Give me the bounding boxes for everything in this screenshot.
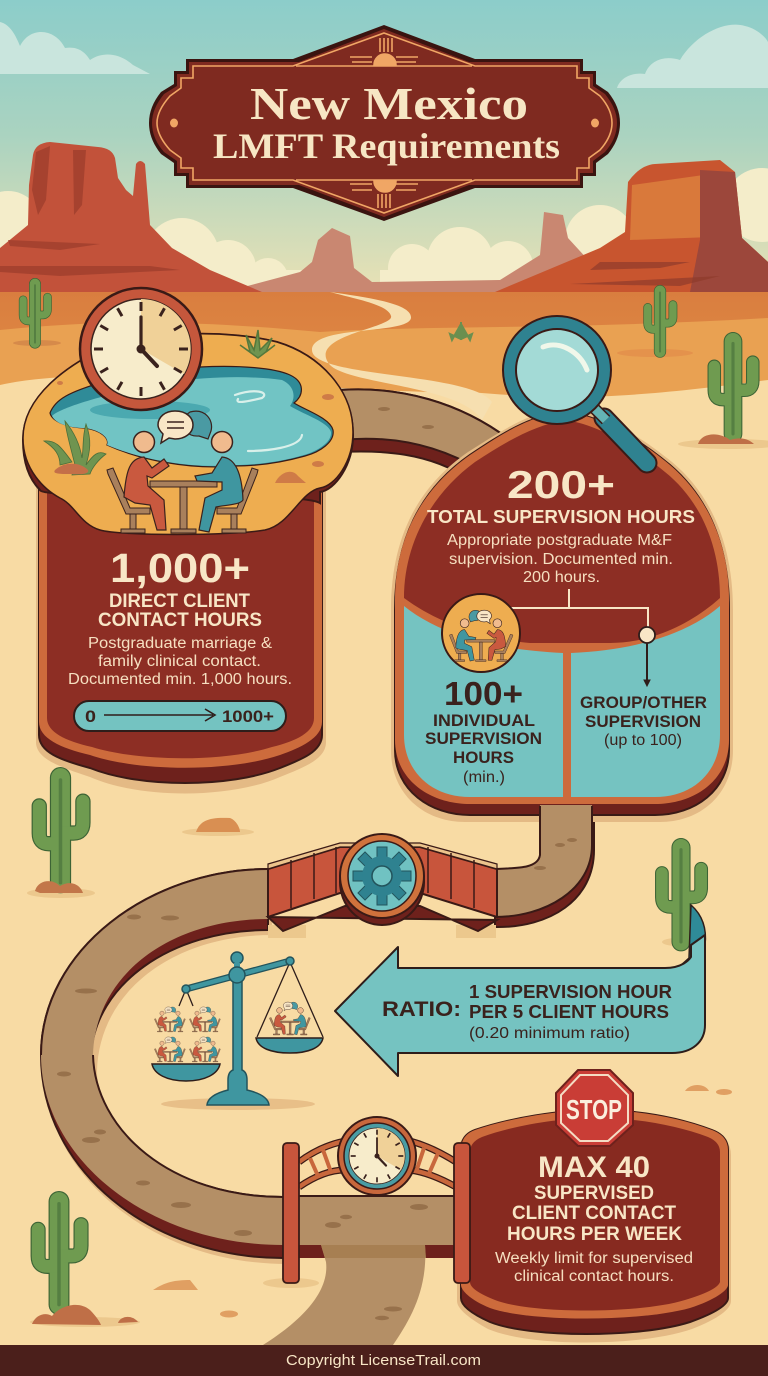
icon: stop sign: STOP [566, 1094, 622, 1125]
text: group other supervision [580, 693, 707, 749]
icon: cactus right large [678, 341, 768, 449]
icon: cactus lower right [662, 848, 701, 946]
stat: max 40: MAX 40 [538, 1151, 650, 1184]
text: group other supervision: SUPERVISION [585, 712, 701, 731]
icon: cactus top right [617, 291, 693, 357]
winding distant road [312, 292, 492, 420]
gear bridge [268, 834, 497, 938]
teal panel: individual [404, 606, 563, 797]
icon: cactus mid left [27, 778, 95, 898]
ribbon arrow: ratio [335, 905, 705, 1076]
connector lines [510, 589, 655, 686]
icon: meeting at table [107, 411, 258, 533]
footer bar [0, 1345, 768, 1376]
icon: zia top [350, 38, 418, 65]
icon: clock [80, 288, 202, 410]
clouds: horizon [0, 168, 768, 298]
icon: individual supervision circle [442, 594, 520, 672]
text: contact description: Documented min. 1,000 hours. [68, 671, 292, 688]
progress pill [74, 701, 286, 731]
gate with clock [263, 1117, 456, 1288]
text: supervision description: Appropriate postgraduate M&F [447, 532, 672, 549]
oasis [23, 330, 353, 534]
progress pill: 0 [85, 707, 96, 726]
mesa: right [495, 160, 768, 292]
stat: 200+: 200+ [507, 464, 615, 507]
divider [563, 650, 571, 800]
progress pill: 1000+ [222, 707, 274, 726]
desert ground bands [0, 292, 768, 1376]
icon: agave plant [44, 421, 106, 475]
icon: balance scale [152, 952, 323, 1110]
heading: total supervision hours: TOTAL SUPERVISION HOURS [427, 506, 695, 527]
panel: max 40 hours [454, 1070, 731, 1342]
icon: supervision group on right pan [269, 1002, 310, 1035]
road: upper connector [340, 389, 510, 480]
icon: cactus top left [13, 284, 61, 346]
icon: client groups on left pan [154, 1007, 220, 1062]
text: individual supervision hours: HOURS [453, 748, 514, 767]
text: ratio rule: PER 5 CLIENT HOURS [469, 1002, 669, 1022]
text: contact description: Postgraduate marriage & [88, 635, 273, 652]
title text: LMFT Requirements [213, 126, 560, 166]
pond [50, 366, 333, 467]
clouds: upper right [617, 25, 768, 88]
text: group other supervision: GROUP/OTHER [580, 693, 707, 712]
clouds: upper left [0, 22, 150, 74]
heading: direct client contact hours: DIRECT CLIENT [109, 591, 250, 612]
icon: stop sign [556, 1070, 633, 1146]
icon: zia bottom [350, 181, 418, 208]
text: ratio rule: 1 SUPERVISION HOUR [469, 982, 672, 1002]
post left [283, 1143, 299, 1283]
road: joins under supervision panel [540, 805, 592, 822]
road: large curve [41, 869, 287, 1264]
background: sky [0, 0, 768, 300]
icon: cactus bottom left [30, 1201, 140, 1327]
heading: direct client contact hours [98, 591, 262, 631]
title text: New Mexico [250, 78, 528, 129]
text: ratio rule [469, 982, 672, 1042]
icon: top shrub [240, 330, 275, 358]
mesa: left [0, 142, 262, 292]
text: ratio rule: (0.20 minimum ratio) [469, 1025, 630, 1042]
label: ratio: RATIO: [382, 998, 461, 1021]
text: contact description: family clinical contact. [98, 653, 261, 670]
icon: distant sagebrush [450, 322, 472, 340]
panel: total supervision hours [391, 316, 733, 822]
text: supervision description [447, 532, 673, 586]
icon: rock mid [182, 818, 254, 836]
text: individual supervision hours: SUPERVISION [425, 729, 542, 748]
heading: direct client contact hours: CONTACT HOURS [98, 610, 262, 631]
road: from supervision panel to bridge [495, 800, 594, 927]
title sign [149, 25, 620, 221]
text: contact description [68, 635, 292, 688]
icon: gate clock [338, 1117, 416, 1195]
stat: 1,000+: 1,000+ [110, 545, 250, 591]
heading: supervised client contact hours per week: CLIENT CONTACT [512, 1203, 676, 1224]
road: exit to bottom [263, 1245, 426, 1345]
icon: gear medallion [340, 834, 424, 925]
heading: supervised client contact hours per week: HOURS PER WEEK [507, 1224, 682, 1245]
title text [213, 78, 560, 166]
text: individual supervision hours [425, 711, 542, 786]
footer bar: Copyright LicenseTrail.com [286, 1352, 481, 1369]
stat: 100+: 100+ [444, 675, 523, 712]
text: supervision description: 200 hours. [523, 569, 600, 586]
heading: supervised client contact hours per week: SUPERVISED [534, 1183, 654, 1204]
text: weekly limit description: Weekly limit for supervised [495, 1250, 693, 1267]
text: individual supervision hours: (min.) [463, 769, 505, 786]
icon: small rocks [153, 1085, 732, 1318]
text: weekly limit description [495, 1250, 693, 1285]
panel: direct client contact hours [23, 288, 353, 794]
icon: rocks on rim [57, 381, 334, 483]
teal panel: group [571, 606, 720, 797]
text: group other supervision: (up to 100) [604, 732, 682, 749]
road: bottom straight section [283, 1196, 463, 1258]
text: individual supervision hours: INDIVIDUAL [433, 711, 535, 730]
text: supervision description: supervision. Documented min. [449, 551, 673, 568]
icon: magnifying glass [503, 316, 647, 463]
heading: supervised client contact hours per week [507, 1183, 682, 1245]
text: weekly limit description: clinical contact hours. [514, 1268, 674, 1285]
distant buttes [225, 212, 605, 292]
